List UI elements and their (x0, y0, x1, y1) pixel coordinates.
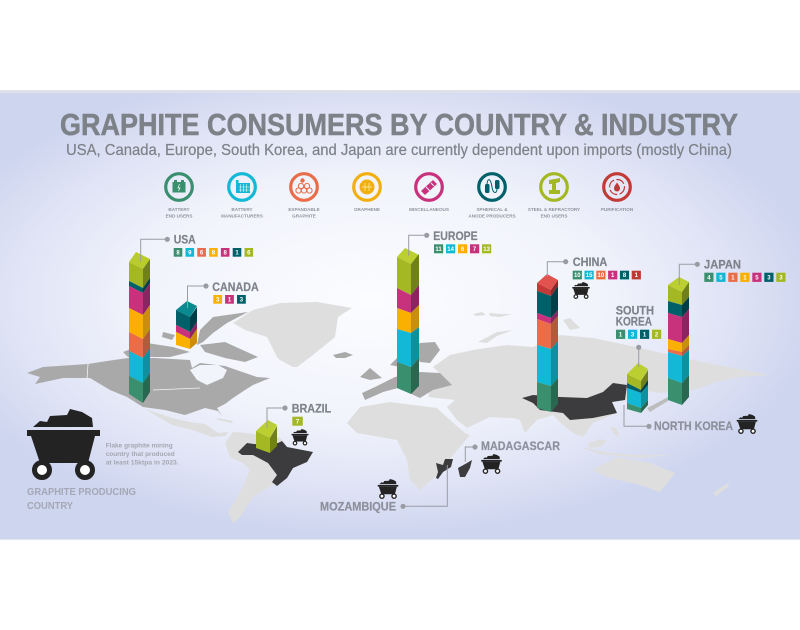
caption: battery end users: BATTERY (168, 207, 190, 212)
label: Japan (679, 258, 786, 285)
label: China: CHINA (573, 255, 608, 269)
label: Brazil: 7 (296, 419, 300, 425)
map: light land masses (145, 302, 770, 523)
caption: expandable graphite: EXPANDABLE (288, 207, 320, 212)
label: USA (141, 233, 253, 262)
label: South Korea: SOUTH (616, 303, 654, 317)
legend description: at least 15ktpa in 2023. (106, 459, 179, 466)
label: China: 15 (586, 273, 593, 279)
bar: Japan (668, 277, 689, 405)
icon: battery end users (166, 174, 192, 200)
legend description: country that produced (106, 451, 175, 458)
label: Europe: 6 (461, 247, 465, 253)
bar: China (537, 274, 558, 412)
subtitle: USA, Canada, Europe, South Korea, and Japan are currently dependent upon imports (mostly China) (66, 142, 732, 159)
label: China: 8 (623, 273, 627, 279)
label: Mozambique: MOZAMBIQUE (320, 500, 396, 514)
map: Madagascar highlighted (458, 460, 472, 477)
icon: expandable graphite (291, 174, 317, 200)
label: USA: 1 (235, 250, 239, 256)
icon: purification (604, 174, 630, 200)
caption: graphene: GRAPHENE (354, 207, 380, 212)
caption: steel and refractory end users: END USERS (541, 214, 567, 218)
label: North Korea: NORTH KOREA (654, 419, 733, 433)
label: North Korea (624, 405, 733, 433)
label: Japan: 1 (743, 276, 747, 282)
legend description: Flake graphite mining (106, 443, 173, 450)
label: USA: 6 (247, 250, 251, 256)
caption: spherical and anode producers: SPHERICAL & (476, 207, 508, 212)
map: China highlighted (522, 383, 627, 420)
label: China (547, 255, 641, 279)
label: China: 10 (598, 273, 605, 279)
label: Europe (409, 229, 491, 256)
label: Japan: JAPAN (704, 258, 741, 272)
icon: cart Brazil (292, 429, 308, 445)
label: Europe: 7 (473, 247, 477, 253)
icon: battery manufacturers (229, 174, 255, 200)
label: Brazil (267, 401, 331, 428)
icon: miscellaneous (416, 174, 442, 200)
icon: spherical and anode producers (479, 174, 505, 200)
label: Canada: CANADA (212, 280, 259, 294)
caption: expandable graphite: GRAPHITE (292, 214, 316, 218)
label: Europe: 11 (435, 247, 442, 253)
label: Canada: 1 (228, 298, 232, 304)
caption: battery manufacturers: BATTERY (231, 207, 253, 212)
icon: cart Madagascar (481, 454, 502, 473)
bar: USA (129, 252, 150, 403)
label: Japan: 5 (719, 276, 723, 282)
label: China: 1 (635, 273, 639, 279)
label: USA: 8 (212, 250, 216, 256)
label: Japan: 5 (755, 276, 759, 282)
label: Canada: 3 (216, 298, 220, 304)
caption: battery manufacturers: MANUFACTURERS (221, 214, 263, 218)
icon: steel and refractory end users (541, 174, 567, 200)
label: USA: USA (174, 233, 196, 247)
bar: South Korea (627, 363, 648, 413)
industry legend (166, 174, 634, 218)
label: South Korea: 3 (631, 332, 635, 338)
caption: steel and refractory end users: STEEL & REFRACTORY (528, 207, 580, 212)
label: South Korea: 1 (643, 332, 647, 338)
label: Japan: 3 (767, 276, 771, 282)
caption: miscellaneous: MISCELLANEOUS (409, 207, 449, 212)
label: Japan: 1 (731, 276, 735, 282)
map: Mozambique highlighted (436, 459, 453, 479)
label: Japan: 3 (779, 276, 783, 282)
legend heading: GRAPHITE PRODUCING (27, 486, 136, 498)
label: USA: 8 (176, 250, 180, 256)
label: Madagascar: MADAGASCAR (481, 439, 560, 453)
label: Europe: 14 (447, 247, 455, 253)
label: Canada (188, 280, 259, 308)
map: Canada and USA (27, 312, 270, 416)
caption: spherical and anode producers: ANODE PRODUCERS (468, 214, 516, 218)
map: Japan (647, 397, 668, 412)
label: USA: 9 (188, 250, 192, 256)
label: South Korea: 2 (655, 332, 659, 338)
label: Madagascar (465, 439, 560, 462)
label: China: 1 (611, 273, 615, 279)
legend: graphite producing country (27, 409, 179, 512)
icon: cart Mozambique (378, 479, 398, 498)
label: South Korea: 1 (619, 332, 623, 338)
world map (27, 302, 770, 523)
label: Japan: 4 (707, 276, 711, 282)
map: Hudson Bay (190, 365, 227, 385)
label: South Korea: KOREA (616, 314, 652, 328)
bar: Canada (176, 301, 197, 349)
label: South Korea (616, 303, 661, 367)
label: USA: 8 (224, 250, 228, 256)
icon: cart North Korea (737, 414, 757, 433)
legend heading: COUNTRY (27, 500, 73, 512)
caption: battery end users: END USERS (166, 214, 192, 218)
label: Brazil: BRAZIL (292, 401, 331, 415)
label: USA: 6 (200, 250, 204, 256)
map: Brazil highlighted (238, 441, 313, 486)
icon: graphene (354, 174, 380, 200)
label: Canada: 3 (240, 298, 244, 304)
map: Europe (333, 342, 452, 400)
background panel (0, 90, 800, 540)
icon: cart China (572, 282, 590, 298)
label: Mozambique (320, 465, 447, 514)
label: China: 10 (574, 273, 581, 279)
label: Europe: 13 (483, 247, 491, 253)
caption: purification: PURIFICATION (601, 207, 634, 212)
bar: Brazil (256, 420, 277, 453)
map: border lines (87, 364, 200, 390)
label: Europe: EUROPE (433, 229, 478, 243)
icon: large mine cart (27, 409, 100, 478)
bar: Europe (397, 248, 419, 394)
